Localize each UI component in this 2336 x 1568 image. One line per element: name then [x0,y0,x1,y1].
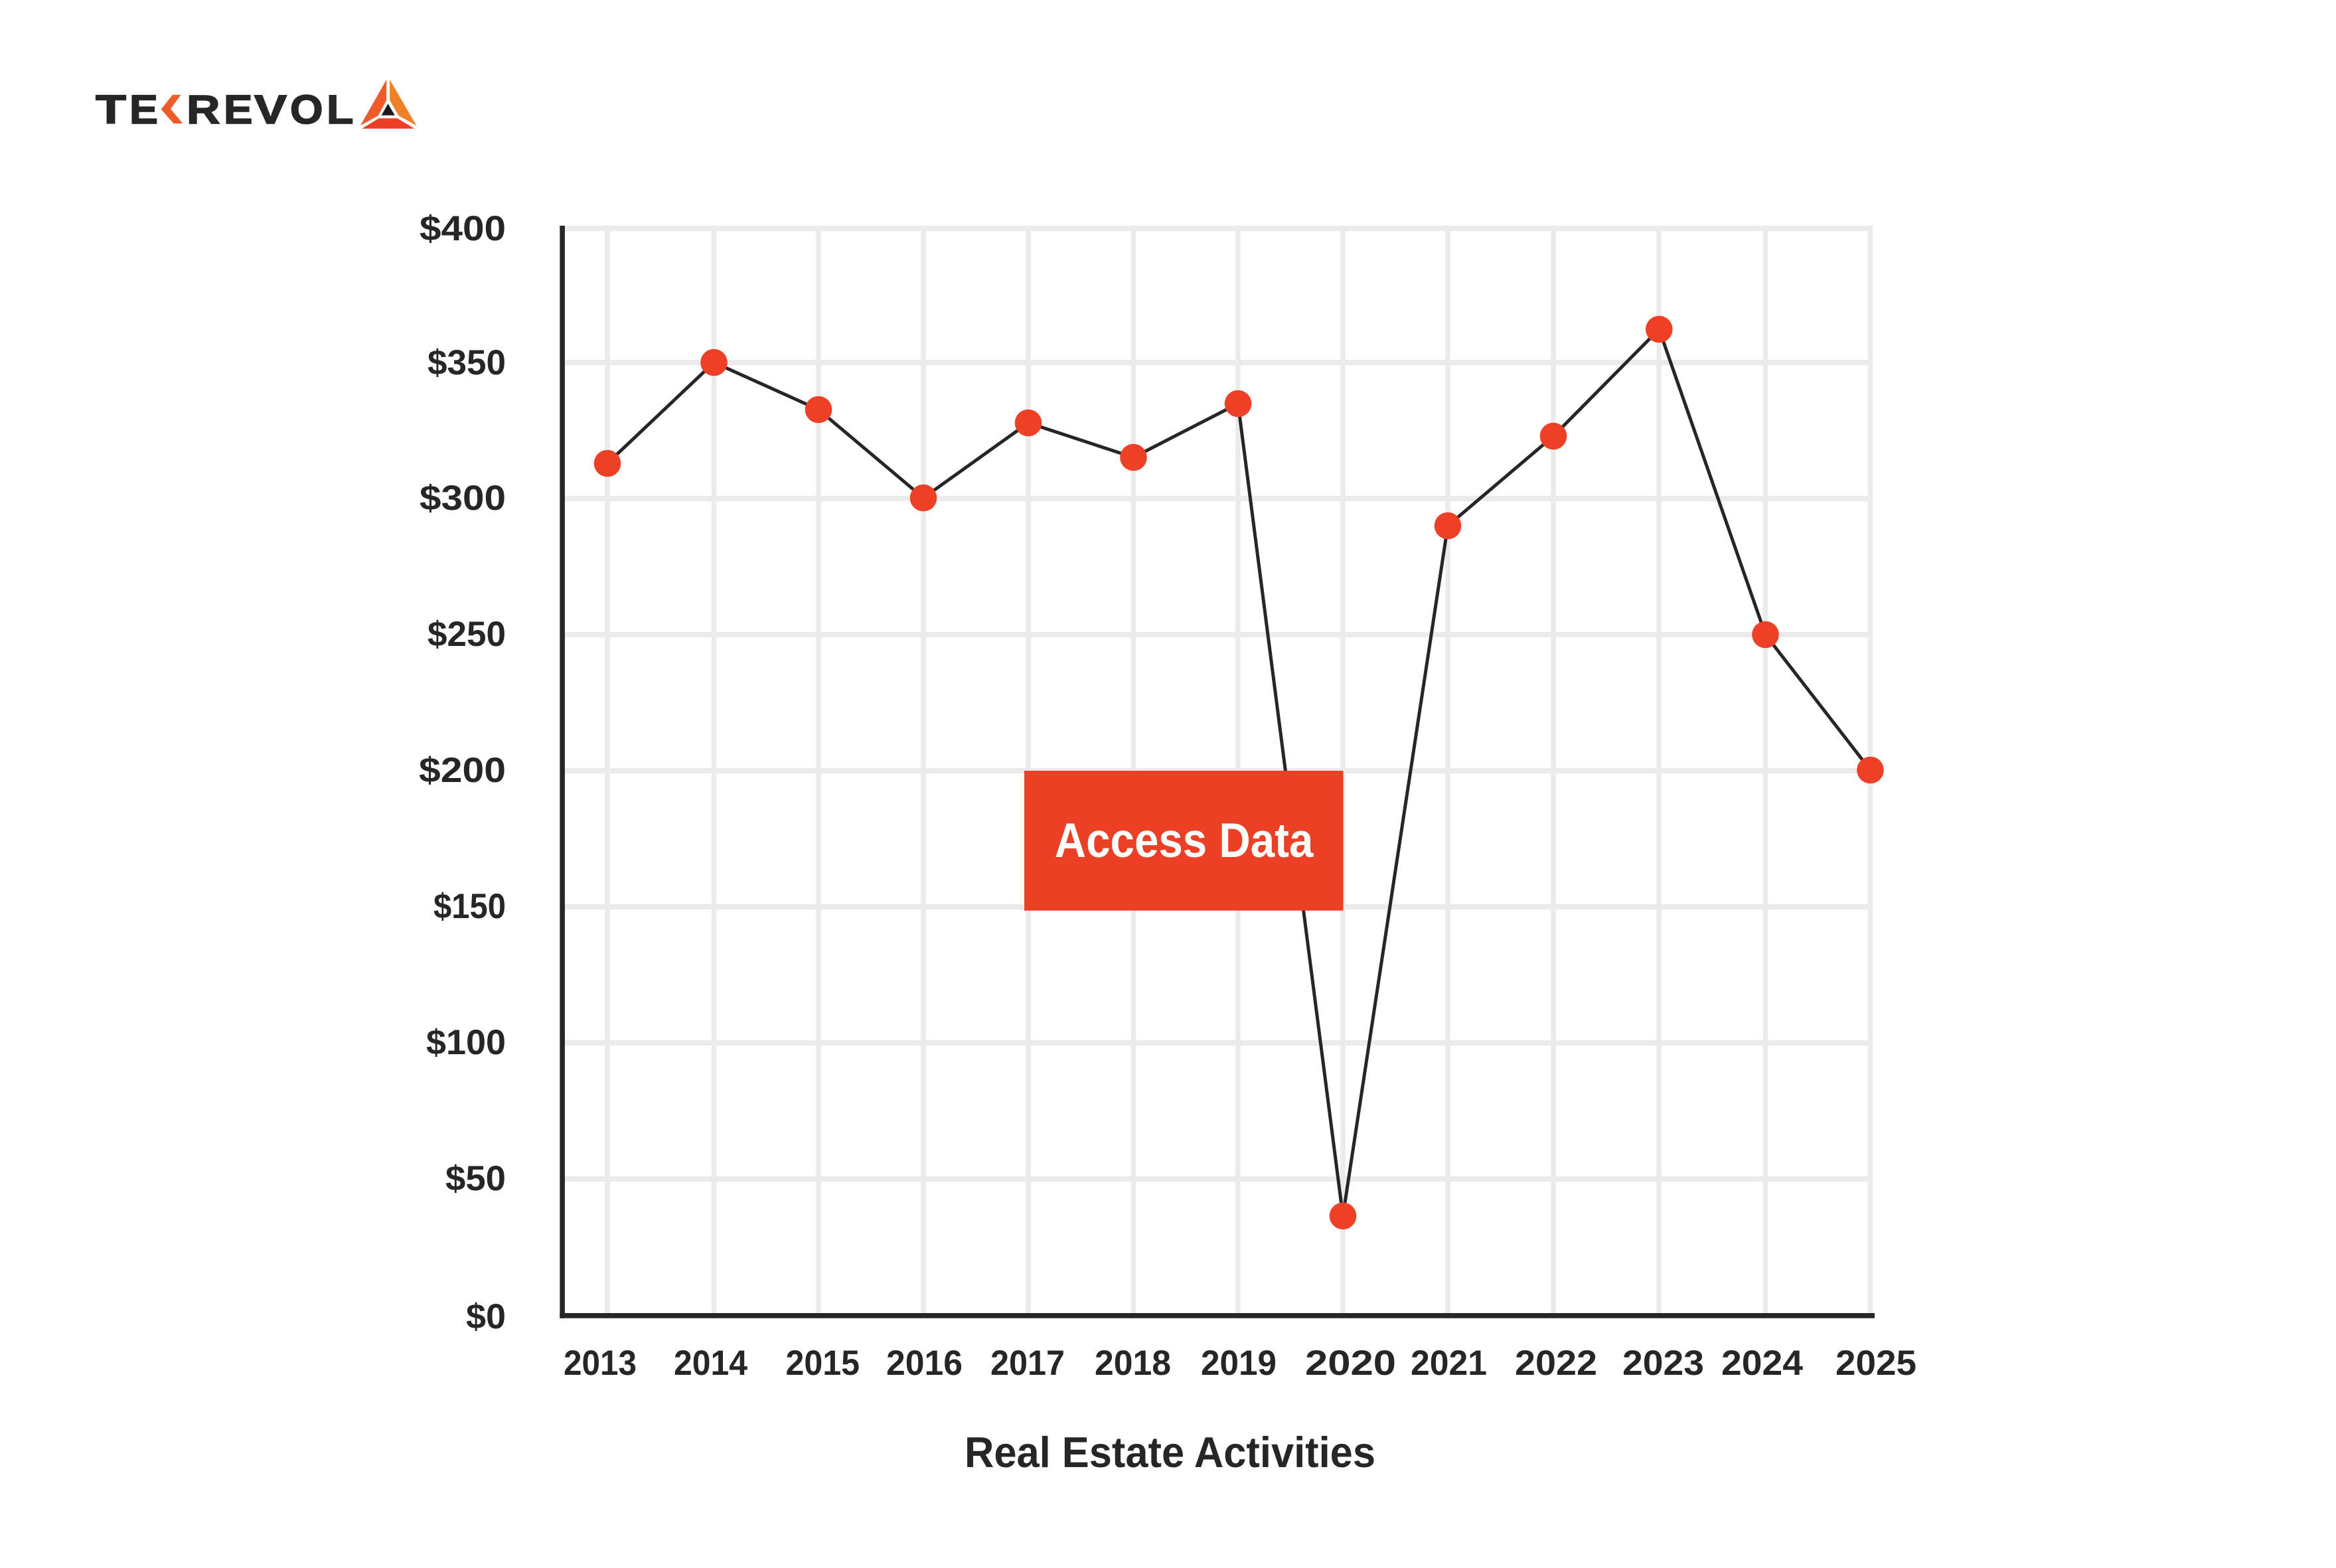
logo: Tekrevol: T [96,87,126,132]
y axis labels: $150 [433,887,506,926]
x axis labels: 2014 [674,1344,747,1383]
y axis labels: $250 [428,615,506,654]
y axis labels: $100 [426,1023,506,1062]
logo: Tekrevol: R [187,87,220,132]
y axis labels: $200 [419,751,506,790]
x axis labels [564,1344,1916,1383]
callout: Access Data: Access Data [1055,814,1314,868]
logo: Tekrevol [96,80,416,132]
logo: Tekrevol: L [327,87,353,132]
logo: Tekrevol: O [290,87,323,132]
x axis labels: 2013 [564,1344,637,1383]
callout: Access Data [1024,771,1344,911]
data points [594,316,1884,1229]
y axis labels [419,209,506,1336]
data line [607,329,1871,1216]
x axis title: Real Estate Activities [965,1428,1375,1476]
x axis labels: 2019 [1201,1344,1277,1383]
x axis labels: 2016 [886,1344,963,1383]
y axis labels: $300 [420,479,506,518]
x axis labels: 2018 [1095,1344,1171,1383]
x axis labels: 2022 [1515,1344,1597,1383]
y axis line [560,226,565,1318]
x axis line [560,1313,1875,1318]
x axis labels: 2025 [1835,1344,1916,1383]
x axis labels: 2017 [990,1344,1065,1383]
y axis labels: $400 [420,209,506,248]
logo: Tekrevol: E [224,87,252,132]
x axis labels: 2021 [1411,1344,1487,1383]
logo: Tekrevol: V [254,87,287,132]
x axis labels: 2015 [786,1344,860,1383]
x axis labels: 2024 [1721,1344,1804,1383]
y axis labels: $0 [466,1297,506,1336]
logo: Tekrevol: E [129,87,158,132]
y axis labels: $50 [445,1159,506,1198]
chart: line chart of real estate activities [560,226,1884,1318]
y axis labels: $350 [428,343,506,382]
x axis labels: 2020 [1305,1344,1396,1383]
x axis labels: 2023 [1622,1344,1704,1383]
